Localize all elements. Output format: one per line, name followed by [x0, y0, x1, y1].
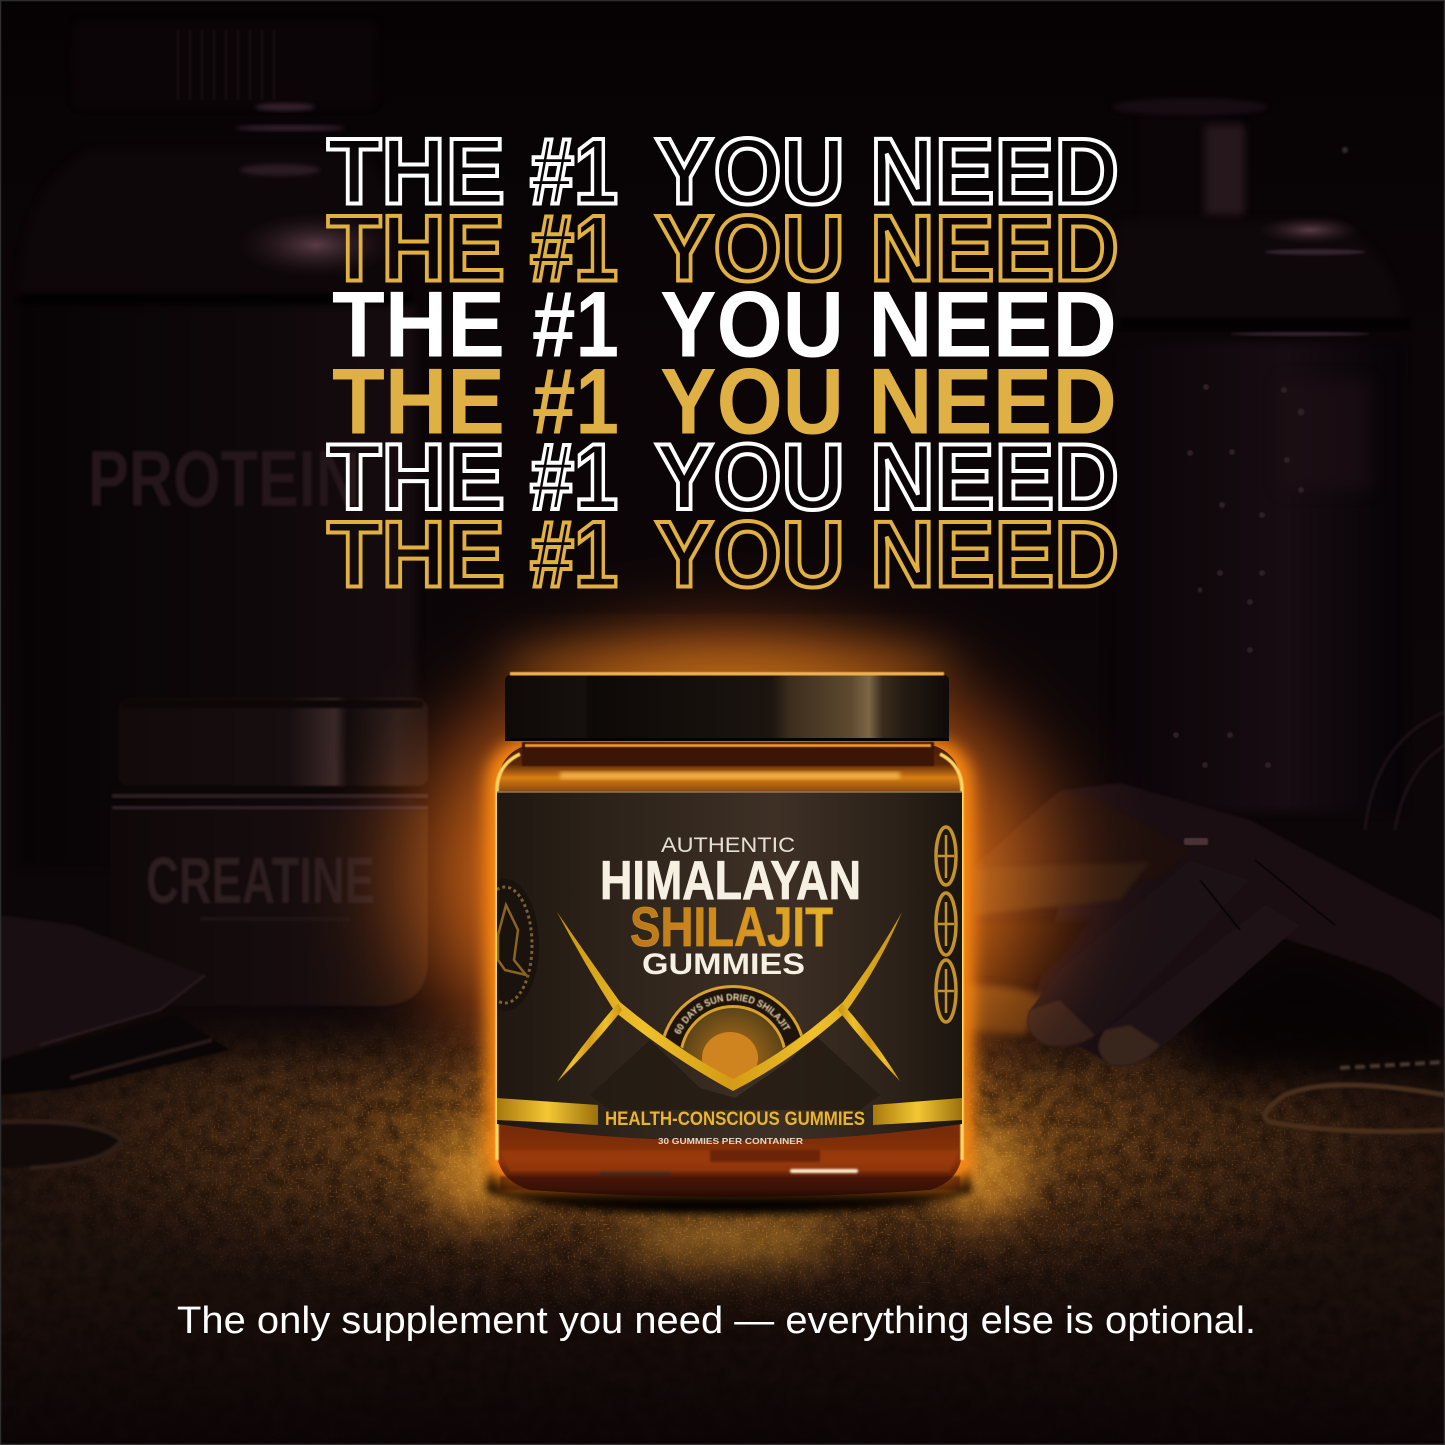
headline line 4 solid gold: YOU [660, 350, 844, 454]
headline line 3 solid white: #1 [532, 273, 619, 377]
ground [1, 1014, 1444, 1376]
headline line 4 solid gold: NEED [868, 350, 1117, 454]
wide orange glow [335, 585, 1125, 1165]
creatine label: CREATINE [146, 843, 375, 917]
headline line 5 outline white: YOU [655, 425, 845, 529]
label text: shilajit: SHILAJIT [630, 895, 833, 958]
chevron emblem [557, 912, 902, 1091]
lid [505, 672, 949, 741]
glove shadow under hand [1190, 945, 1445, 1080]
headline line 3 solid white [332, 273, 1117, 377]
headline line 1 outline white: NEED [870, 120, 1119, 224]
weight plate right [1365, 712, 1445, 830]
glove left [0, 915, 230, 1168]
sun badge [663, 985, 803, 1079]
floor hot spots [428, 1130, 1032, 1260]
headline line 6 outline gold: #1 [530, 503, 618, 607]
headline line 2 outline gold: NEED [870, 196, 1119, 300]
jar shadow [486, 1172, 972, 1214]
headline line 2 outline gold: #1 [530, 196, 618, 300]
headline line 4 solid gold: #1 [532, 350, 619, 454]
headline line 1 outline white: YOU [655, 120, 845, 224]
label [497, 791, 962, 1146]
label text: himalayan: HIMALAYAN [600, 849, 861, 911]
headline line 5 outline white: #1 [530, 425, 618, 529]
headline line 5 outline white [327, 425, 1119, 529]
jar halo [497, 752, 962, 1178]
headline line 2 outline gold [327, 196, 1119, 300]
tagline: The only supplement you need — everything else is optional. [177, 1300, 1256, 1342]
protein label: PROTEIN [88, 434, 360, 523]
lid haze [497, 636, 957, 692]
headline line 6 outline gold: THE [327, 503, 505, 607]
seal left [497, 884, 539, 1004]
headline line 2 outline gold: YOU [655, 196, 845, 300]
headline line 5 outline white: NEED [870, 425, 1119, 529]
jar neck [522, 742, 934, 766]
creatine tub [110, 698, 428, 1006]
mountains [590, 1035, 880, 1110]
headline line 5 outline white: THE [327, 425, 505, 529]
headline line 4 solid gold: THE [332, 350, 505, 454]
carabiner right [1265, 1062, 1445, 1131]
gold band left [497, 1098, 598, 1125]
shaker bottle [1105, 98, 1410, 812]
gold band right [873, 1098, 962, 1125]
headline line 3 solid white: THE [332, 273, 505, 377]
headline line 6 outline gold [327, 503, 1119, 607]
headline line 6 outline gold: NEED [870, 503, 1119, 607]
headline line 4 solid gold [332, 350, 1117, 454]
headline line 6 outline gold: YOU [655, 503, 845, 607]
seals right [936, 827, 956, 1022]
label text: authentic: AUTHENTIC [661, 834, 795, 857]
headline line 3 solid white: NEED [868, 273, 1117, 377]
glass bottom reflections [500, 1150, 960, 1190]
tagline on label: HEALTH-CONSCIOUS GUMMIES [605, 1109, 865, 1130]
protein tub [18, 22, 416, 866]
glove right [965, 783, 1445, 1080]
glove back-of-hand [1030, 783, 1445, 1060]
headline line 2 outline gold: THE [327, 196, 505, 300]
shaker droplets [1173, 384, 1304, 768]
jar edge highlight [497, 754, 962, 1160]
jar body [497, 746, 962, 1197]
headline line 3 solid white: YOU [660, 273, 844, 377]
headline stack [327, 120, 1119, 607]
badge text: 60 DAYS SUN DRIED SHILAJIT [674, 992, 791, 1035]
headline line 1 outline white: THE [327, 120, 505, 224]
glove fingers [1027, 860, 1250, 1046]
headline line 1 outline white [327, 120, 1119, 224]
label text: gummies: GUMMIES [642, 948, 805, 981]
count on label: 30 GUMMIES PER CONTAINER [658, 1136, 803, 1146]
product jar [474, 672, 986, 1220]
headline line 1 outline white: #1 [530, 120, 618, 224]
